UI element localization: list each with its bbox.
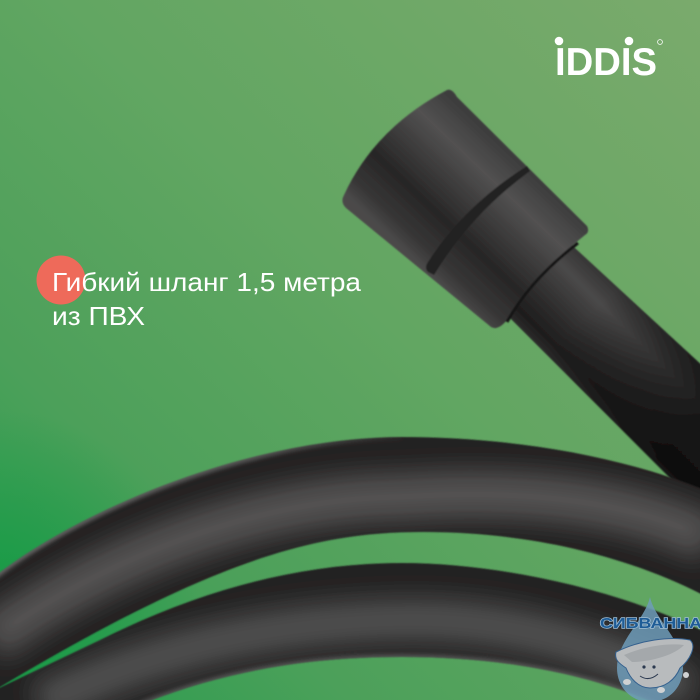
hose tube leaving the connector bbox=[482, 225, 700, 500]
bathtub face bbox=[640, 665, 658, 679]
shower hose connector bbox=[342, 90, 700, 500]
accent circle bbox=[36, 256, 86, 304]
caption text: Гибкий шланг 1,5 метра bbox=[52, 267, 362, 297]
watermark text: СИБВАННА bbox=[600, 615, 700, 632]
caption text bbox=[52, 267, 362, 331]
cap groove ring bbox=[426, 166, 530, 275]
lower hose coil bbox=[0, 563, 700, 700]
bathtub feet bbox=[623, 672, 689, 693]
shoulder shadow bbox=[507, 243, 578, 322]
bathtub bbox=[616, 638, 693, 688]
upper hose coil bbox=[0, 437, 700, 690]
metal cap body bbox=[342, 90, 588, 328]
logo: IDDIS: IDDIS bbox=[555, 41, 657, 84]
water drop bbox=[617, 597, 683, 700]
watermark: Sibvanna logo bbox=[600, 597, 700, 700]
bathtub inner rim bbox=[624, 644, 684, 662]
caption text: из ПВХ bbox=[52, 301, 145, 331]
